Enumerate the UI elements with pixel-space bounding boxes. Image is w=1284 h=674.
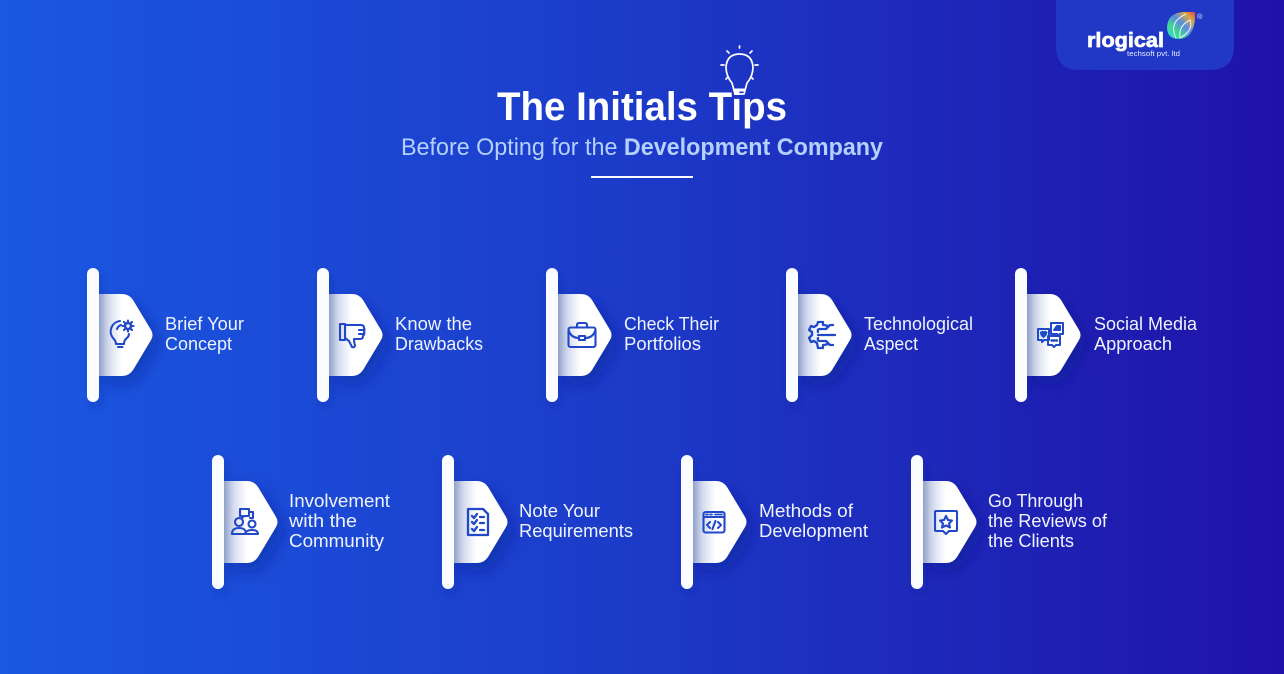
label: Brief Your	[165, 313, 244, 334]
label: Check Their	[624, 313, 719, 334]
label	[988, 490, 1108, 551]
logo tagline: techsoft pvt. ltd	[1127, 49, 1180, 58]
tip: Technological Aspect	[786, 268, 973, 402]
tip: Know the Drawbacks	[317, 268, 483, 402]
label: Aspect	[864, 333, 918, 354]
label	[1094, 313, 1198, 354]
icon: thumbs down	[340, 324, 364, 347]
tip: Brief Your Concept	[87, 268, 244, 402]
label	[395, 313, 483, 354]
tip: Social Media Approach	[1015, 268, 1198, 402]
icon: tech gear circuit	[809, 322, 835, 348]
label: Go Through	[988, 490, 1083, 511]
icon: bulb with gear	[111, 320, 134, 347]
icon: checklist document	[468, 509, 488, 535]
label	[519, 500, 633, 541]
label	[165, 313, 244, 354]
label	[624, 313, 719, 354]
label: Involvement	[289, 490, 390, 511]
tip: Involvement with the Community	[212, 455, 390, 589]
icon: code window	[704, 512, 724, 532]
label: Requirements	[519, 520, 633, 541]
title: The Initials Tips	[497, 85, 787, 129]
label: Know the	[395, 313, 472, 334]
label: with the	[288, 510, 357, 531]
label: Approach	[1094, 333, 1172, 354]
label: Social Media	[1094, 313, 1198, 334]
logo leaf mark	[1167, 12, 1195, 39]
tip: Go Through the Reviews of the Clients	[911, 455, 1108, 589]
logo wordmark: rlogical	[1087, 29, 1164, 52]
label: Drawbacks	[395, 333, 483, 354]
tip: Check Their Portfolios	[546, 268, 719, 402]
icon: light bulb	[721, 46, 758, 94]
icon: community people	[232, 509, 258, 534]
label: Note Your	[519, 500, 600, 521]
icon: social chat bubbles	[1038, 323, 1063, 347]
registered mark: ®	[1197, 12, 1203, 21]
label: Development	[759, 520, 868, 541]
label: Technological	[864, 313, 973, 334]
icon: review star badge	[935, 511, 957, 534]
subtitle: Before Opting for the Development Company	[401, 134, 884, 161]
label	[288, 490, 390, 551]
label: the Reviews of	[988, 510, 1108, 531]
logo panel	[1056, 0, 1234, 70]
label: Portfolios	[624, 333, 701, 354]
label	[864, 313, 973, 354]
tip: Methods of Development	[681, 455, 868, 589]
label: the Clients	[988, 530, 1074, 551]
tip: Note Your Requirements	[442, 455, 633, 589]
label: Community	[289, 530, 385, 551]
label: Concept	[165, 333, 232, 354]
label	[759, 500, 868, 541]
title divider	[591, 176, 693, 178]
label: Methods of	[759, 500, 854, 521]
icon: briefcase	[568, 323, 596, 347]
